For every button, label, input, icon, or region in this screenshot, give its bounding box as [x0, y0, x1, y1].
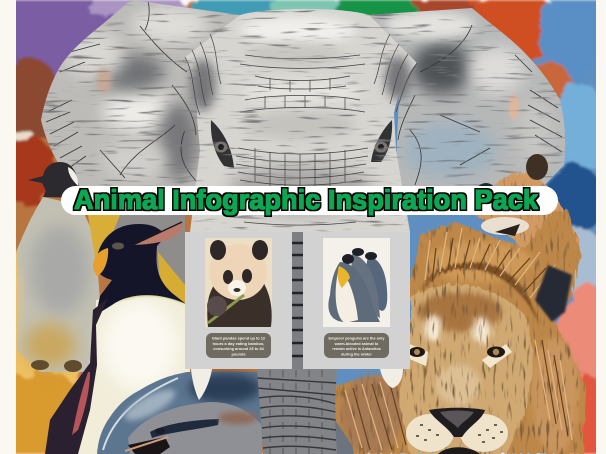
penguin caption: remain active in Antarctica — [332, 347, 381, 351]
rear penguin — [17, 162, 100, 372]
lion muzzle and nose — [406, 408, 508, 454]
card: panda fact — [185, 232, 292, 369]
panda caption — [206, 333, 271, 358]
dolphin — [97, 372, 262, 454]
panda caption: consuming around 26 to 84 — [213, 346, 265, 351]
forehead wrinkles — [185, 34, 417, 225]
card: penguin fact — [303, 232, 410, 369]
panda caption: Giant pandas spend up to 12 — [212, 336, 266, 340]
elephant head — [185, 9, 417, 232]
front penguin — [45, 215, 190, 454]
lion eyes — [405, 342, 512, 368]
right eye — [371, 120, 392, 162]
title text: Animal Infographic Inspiration Pack — [74, 184, 538, 215]
penguin caption — [324, 333, 389, 358]
lion — [335, 208, 585, 454]
right ear — [369, 8, 565, 190]
panda illustration — [205, 238, 272, 327]
penguin head — [93, 221, 186, 315]
panda caption: pounds — [231, 351, 246, 356]
penguin caption: during the winter — [341, 352, 372, 356]
dark mane gap — [535, 265, 572, 322]
panda caption: hours a day eating bamboo, — [213, 341, 264, 346]
title banner — [61, 184, 558, 215]
left ear — [41, 0, 240, 190]
grey elephant patch behind penguin — [88, 215, 185, 300]
penguin caption: warm-blooded animal to — [334, 342, 379, 346]
strip of trunk between cards — [292, 232, 303, 369]
penguins illustration — [323, 238, 390, 327]
elephant trunk — [257, 369, 354, 454]
elephant — [41, 0, 565, 232]
mane streaks — [345, 228, 572, 450]
lion face — [398, 284, 532, 454]
penguin caption: Emperor penguins are the only — [329, 336, 385, 340]
left eye — [211, 120, 234, 168]
tiger peeking behind title — [475, 154, 580, 290]
title pill — [61, 186, 558, 215]
elephant tusks — [191, 369, 403, 400]
penguin flipper — [45, 298, 108, 454]
lion mane — [335, 208, 585, 454]
